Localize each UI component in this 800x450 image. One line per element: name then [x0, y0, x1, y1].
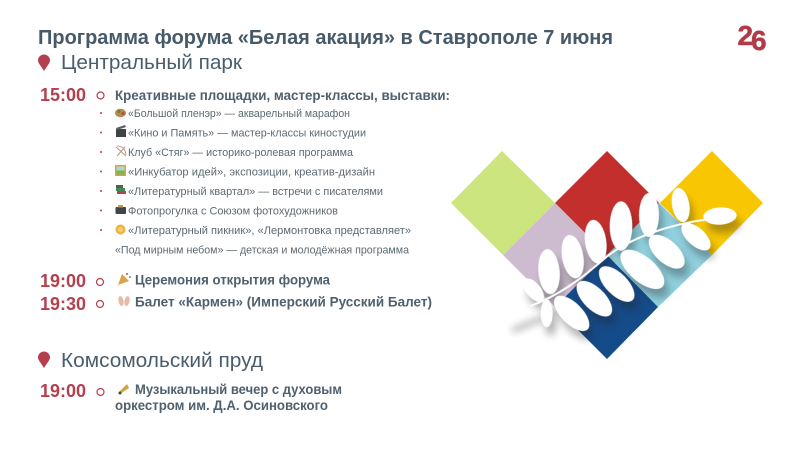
branch stem	[530, 219, 707, 306]
time 19:30: 19:30	[40, 294, 86, 314]
schedule: 19:00 music evening	[40, 381, 342, 413]
icon: sun flower	[116, 224, 126, 234]
acacia branch	[512, 186, 741, 346]
event text: Церемония открытия форума	[135, 272, 330, 288]
illustration: heart of coloured diamonds with acacia branch	[451, 151, 763, 359]
event text: Музыкальный вечер с духовым	[135, 381, 342, 397]
marker	[97, 92, 104, 99]
item 7: «Литературный пикник», «Лермонтовка представляет»	[128, 225, 411, 237]
item 4: «Инкубатор идей», экспозиции, креатив-дизайн	[128, 166, 375, 178]
item 2: «Кино и Память» — мастер-классы киностудии	[128, 128, 366, 140]
icon: location pin, Central Park	[38, 55, 50, 71]
marker	[97, 388, 104, 396]
icon: clapperboard	[116, 125, 126, 137]
time 19:00: 19:00	[40, 381, 86, 401]
icon: bow and arrow	[116, 146, 126, 156]
schedule: 19:30 ballet	[40, 294, 432, 314]
logo: 26: 6	[751, 25, 767, 56]
item 8: «Под мирным небом» — детская и молодёжная программа	[115, 244, 410, 256]
item 5: «Литературный квартал» — встречи с писателями	[128, 186, 383, 198]
icon: camera	[116, 205, 126, 214]
diamond: light blue	[607, 203, 712, 307]
marker	[96, 278, 104, 286]
bullets	[100, 112, 102, 231]
time 15:00: 15:00	[40, 85, 86, 105]
icon: trumpet	[118, 384, 129, 394]
diamond: green	[451, 151, 555, 255]
marker	[96, 300, 104, 308]
diamond: red	[555, 151, 659, 255]
item 3: Клуб «Стяг» — историко-ролевая программа	[128, 147, 354, 159]
logo: 26	[738, 20, 767, 56]
title: Программа форума «Белая акация» в Ставрополе 7 июня	[38, 27, 613, 49]
leaves	[519, 186, 737, 337]
icon: location pin, Komsomolsky Pond	[38, 352, 50, 368]
branch shadow	[512, 195, 741, 346]
schedule: 19:00 music evening: оркестром им. Д.А. Осиновского	[115, 397, 328, 413]
heading: Central Park: Центральный парк	[61, 52, 242, 74]
schedule: 19:00 opening ceremony	[40, 271, 330, 291]
heading: Komsomolsky Pond: Комсомольский пруд	[61, 350, 263, 372]
icon: palette	[115, 109, 126, 117]
diamond: navy	[555, 255, 658, 359]
icon: party popper	[118, 273, 131, 285]
diamond: lilac	[503, 203, 607, 307]
item 1: «Большой пленэр» — акварельный марафон	[128, 108, 350, 120]
time 19:00: 19:00	[40, 271, 86, 291]
icon: ballet shoes	[118, 296, 130, 306]
item 6: Фотопрогулка с Союзом фотохудожников	[128, 206, 338, 218]
activity list	[100, 108, 411, 256]
schedule: 15:00	[40, 85, 450, 105]
activity heading: Креативные площадки, мастер-классы, выставки:	[115, 87, 450, 103]
icon: framed picture	[115, 165, 126, 176]
event text: Балет «Кармен» (Имперский Русский Балет)	[135, 294, 432, 310]
icon: books	[116, 185, 126, 194]
diamond: yellow	[660, 151, 763, 255]
logo: 26: 2	[738, 20, 753, 51]
